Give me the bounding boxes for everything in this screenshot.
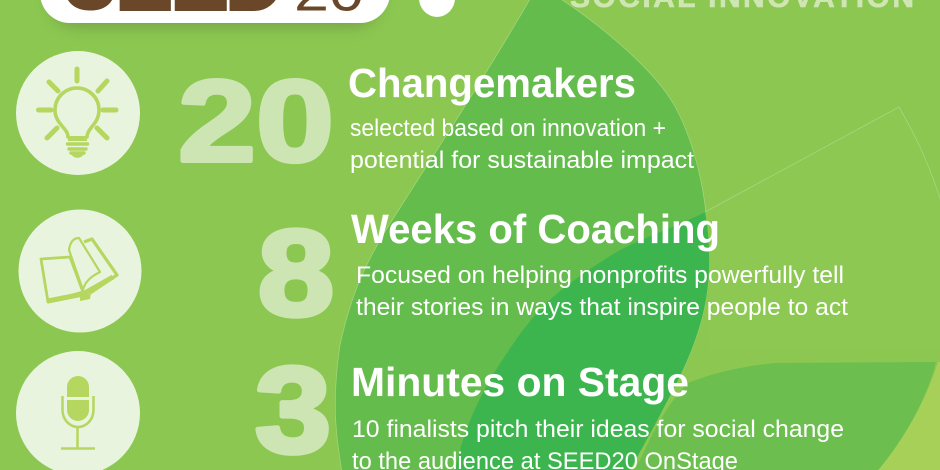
leaf: yellow green corner bbox=[874, 362, 940, 470]
description: changemakers: selected based on innovation + bbox=[350, 115, 666, 142]
row: coaching bbox=[18, 205, 848, 341]
description: coaching bbox=[356, 262, 848, 321]
row: changemakers bbox=[16, 51, 694, 186]
logo shadow bbox=[48, 0, 382, 28]
description: changemakers bbox=[350, 115, 694, 174]
leaf outline: upper right edge bbox=[705, 107, 940, 215]
description: stage bbox=[352, 416, 844, 470]
leaf overlap: dark green lens bbox=[452, 212, 709, 470]
logo white plate bbox=[40, 0, 390, 23]
leaf: faint upper right leaf bbox=[705, 107, 940, 350]
icon: open book bbox=[18, 210, 142, 332]
icon: light bulb bbox=[16, 51, 140, 175]
title: weeks of coaching: Weeks of Coaching bbox=[351, 206, 720, 252]
number 8: 8 bbox=[258, 205, 334, 341]
logo wordmark SEED bbox=[61, 0, 288, 38]
logo badge bbox=[40, 0, 390, 38]
leaf: large centre leaf bbox=[335, 0, 709, 470]
icon: microphone bbox=[16, 351, 140, 470]
leaf: lower right leaf bbox=[620, 362, 936, 470]
leaf illustration bbox=[335, 0, 940, 470]
description: coaching: Focused on helping nonprofits powerfully tell bbox=[356, 262, 844, 289]
description: coaching: their stories in ways that inspire people to act bbox=[356, 294, 848, 321]
description: stage: 10 finalists pitch their ideas for social change bbox=[352, 416, 844, 443]
description: changemakers: potential for sustainable impact bbox=[350, 147, 694, 174]
exclamation dot bbox=[419, 0, 455, 17]
title: changemakers: Changemakers bbox=[348, 60, 636, 106]
number 20: 20 bbox=[178, 56, 334, 186]
row: stage bbox=[16, 342, 844, 470]
title: minutes on stage: Minutes on Stage bbox=[351, 359, 689, 405]
